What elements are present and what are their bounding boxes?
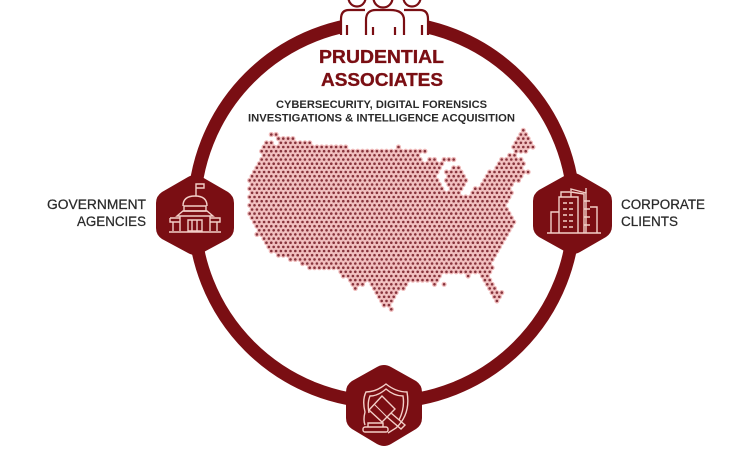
corporate clients label <box>621 197 705 229</box>
maroon ring <box>194 0 574 402</box>
hexagon: legal <box>346 365 422 446</box>
corporate clients hexagon <box>533 173 612 254</box>
corporate clients label: CORPORATE <box>621 197 705 212</box>
title <box>319 46 444 90</box>
title: ASSOCIATES <box>321 69 443 90</box>
icon: capitol building <box>169 184 221 232</box>
icon: people group <box>341 0 428 35</box>
icon: office towers <box>547 188 601 233</box>
dotted USA map <box>250 130 533 309</box>
subtitle: CYBERSECURITY, DIGITAL FORENSICS <box>276 99 487 111</box>
corporate clients label: CLIENTS <box>621 214 678 229</box>
government agencies label <box>47 197 146 229</box>
subtitle <box>248 99 515 124</box>
subtitle: INVESTIGATIONS & INTELLIGENCE ACQUISITION <box>248 112 515 124</box>
government agencies label: GOVERNMENT <box>47 197 146 212</box>
title: PRUDENTIAL <box>319 46 444 67</box>
government agencies hexagon <box>156 175 234 255</box>
hexagon: government <box>156 175 234 255</box>
legal hexagon <box>346 365 422 446</box>
hexagon: corporate <box>533 173 612 254</box>
icon: shield and gavel <box>363 384 408 433</box>
government agencies label: AGENCIES <box>77 214 146 229</box>
